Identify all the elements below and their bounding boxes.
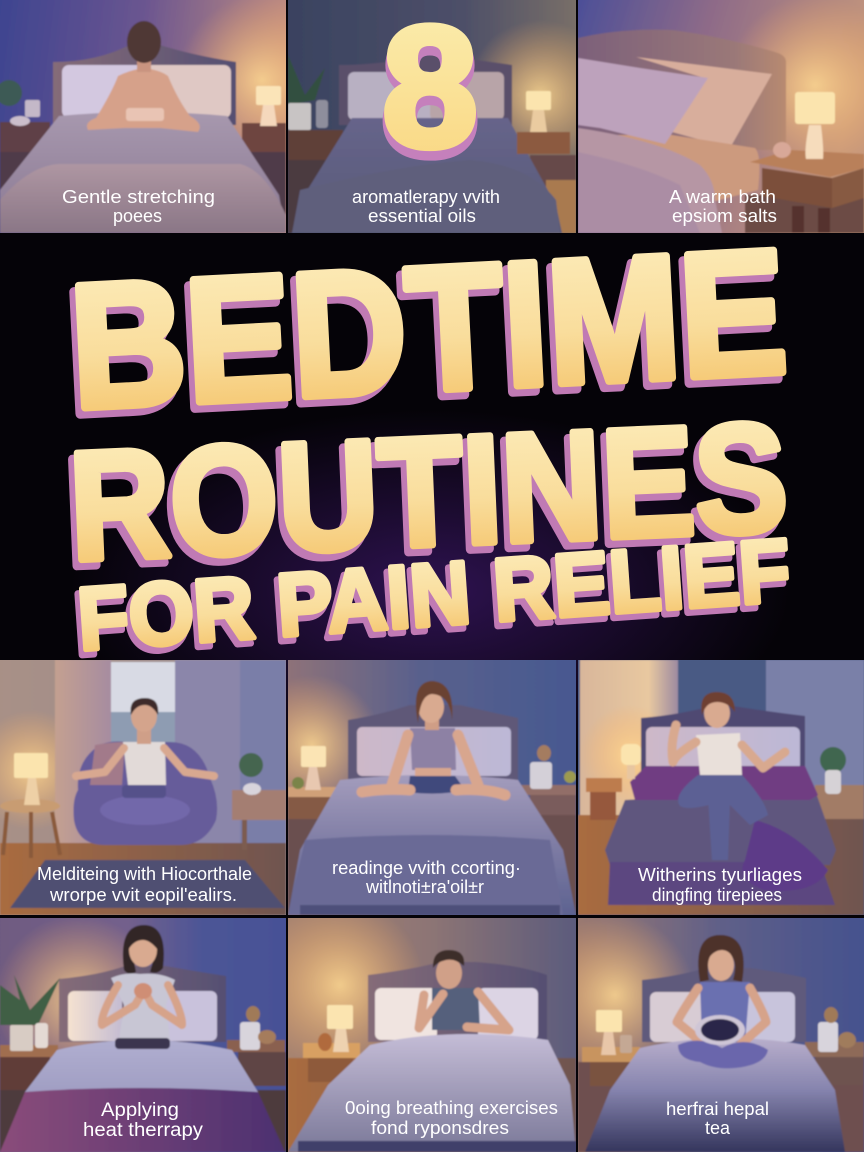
caption: witlnoti±ra'oil±r (365, 877, 484, 897)
caption (345, 1098, 558, 1138)
figure: woman from behind (87, 21, 200, 132)
caption (37, 864, 252, 905)
caption (638, 865, 802, 905)
figure: seated woman (362, 681, 505, 795)
panel: meditating (0, 655, 291, 920)
scene: bedroom with blue wall (535, 913, 864, 1152)
caption: essential oils (368, 206, 476, 226)
panel: herbal tea (535, 913, 864, 1152)
caption: epsiom salts (672, 206, 777, 226)
caption: aromatlerapy vvith (352, 187, 500, 207)
scene: bedroom with candle and oils (288, 0, 576, 233)
panel: aromatherapy (288, 0, 576, 233)
icon: bedside lamp (14, 753, 48, 805)
panel: warm bath (575, 0, 864, 238)
icon: bedside lamp (621, 744, 641, 779)
figure: woman with heat pack (102, 925, 182, 1049)
caption (669, 187, 777, 226)
figure: reclining woman (672, 692, 785, 860)
scene: warm bedroom at night (288, 918, 576, 1152)
caption: wrorpe vvit eopil'ealirs. (49, 885, 237, 905)
caption: fond ryponsdres (371, 1118, 509, 1138)
scene: bedroom with plant (0, 913, 291, 1152)
title line: BEDTIME: BEDTIME (66, 212, 791, 446)
panel: breathing exercises (288, 918, 576, 1152)
caption: A warm bath (669, 187, 776, 207)
panel: heat therapy (0, 913, 291, 1152)
caption: Applying (101, 1100, 179, 1121)
caption: readinge vvith ccorting· (332, 858, 521, 878)
figure: woman with tea bowl (677, 935, 768, 1068)
caption: dingfing tirepiees (652, 885, 782, 905)
panel: reading (288, 660, 576, 915)
scene: armchair by window (0, 655, 291, 920)
caption: Gentle stretching (62, 187, 215, 207)
caption: heat therrapy (83, 1120, 204, 1141)
chair (74, 741, 217, 845)
icon: potted plant (0, 975, 60, 1051)
caption: Melditeing with Hiocorthale (37, 864, 252, 884)
central glow (70, 410, 790, 770)
numeral 8: 8 (382, 0, 478, 191)
icon: bedside lamp (256, 86, 281, 126)
panel: gentle stretching (0, 0, 286, 233)
caption (62, 187, 215, 226)
scene: bedroom with curtains and rug (575, 655, 864, 920)
icon: bedside lamp (596, 1010, 622, 1055)
icon: bedside lamp (301, 746, 326, 790)
title line: BEDTIME: BEDTIME (61, 218, 786, 452)
scene: warm bedroom corner (575, 0, 864, 238)
panel: winding down (575, 655, 864, 920)
title line: FOR PAIN RELIEF: FOR PAIN RELIEF (71, 525, 790, 674)
figure: woman breathing (419, 950, 509, 1030)
icon: bedside lamp (327, 1005, 353, 1052)
scene: bedroom with seated woman (288, 660, 576, 915)
scene: bedroom with stretching woman (0, 0, 286, 233)
title line: FOR PAIN RELIEF: FOR PAIN RELIEF (74, 519, 794, 669)
caption: Witherins tyurliages (638, 865, 802, 885)
icon: bedside lamp (526, 91, 551, 132)
icon: potted plant (288, 55, 328, 130)
caption: poees (113, 206, 162, 226)
caption (333, 860, 519, 893)
caption (83, 1100, 204, 1141)
caption (666, 1099, 769, 1138)
title line: ROUTINES: ROUTINES (66, 390, 791, 593)
figure: meditating woman (76, 698, 214, 798)
icon: bedside lamp (795, 92, 835, 159)
caption: 0oing breathing exercises (345, 1098, 558, 1118)
caption: tea (705, 1118, 731, 1138)
title line: ROUTINES: ROUTINES (61, 396, 786, 599)
caption: herfrai hepal (666, 1099, 769, 1119)
title (61, 212, 794, 674)
caption (352, 190, 499, 222)
